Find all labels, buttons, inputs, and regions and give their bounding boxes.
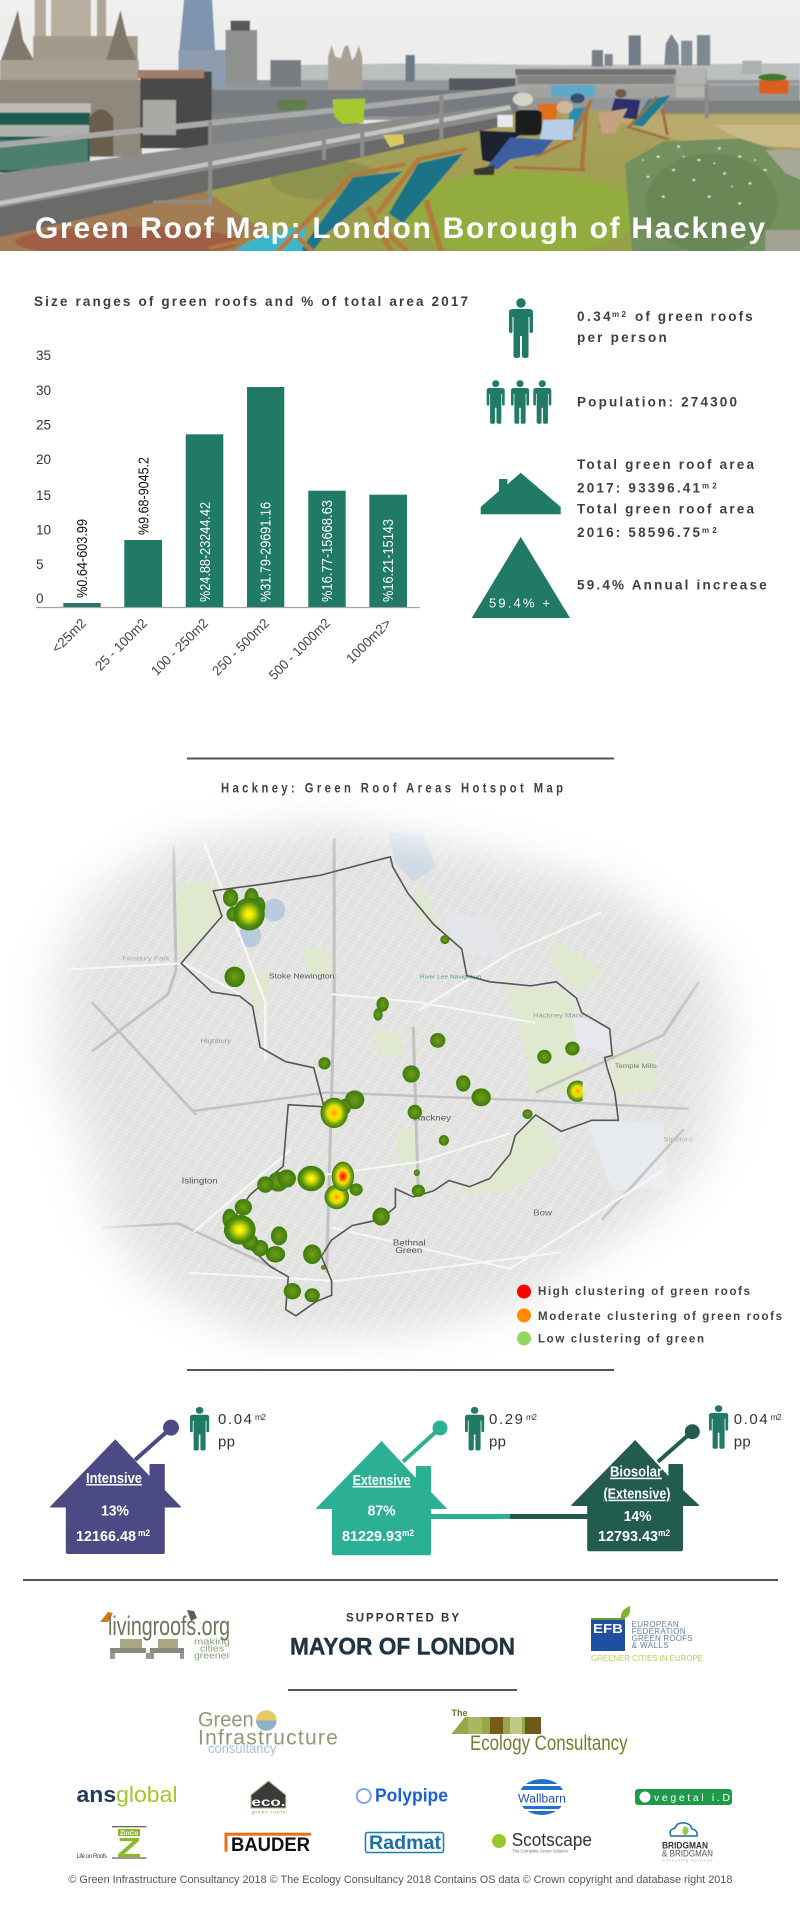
per person: extensive: m2 [526,1412,537,1422]
supported by: Mayor of London: SUPPORTED BY [346,1613,459,1625]
bar value labels: %16.21-15143 [380,519,397,602]
place labels: Islington [182,1176,218,1185]
logo: ZinCo: ZinCo [120,1831,138,1837]
title: Green Roof Map: London Borough of Hackney [35,212,765,245]
icon: increase triangle: 59.4% + [489,595,550,610]
bar value labels: %31.79-29691.16 [258,502,275,602]
logo: Scotscape [492,1830,592,1854]
logo: ZinCo: Z [117,1832,141,1863]
y axis labels: 30 [36,383,51,398]
logo: The Ecology Consultancy [452,1708,628,1755]
supported by: Mayor of London [290,1613,515,1660]
y axis labels: 0 [36,591,44,606]
house: biosolar: (Extensive) [604,1486,670,1503]
heat blobs: moderate and high clustering [224,898,588,1244]
logo: eco green roofs: eco. [252,1795,286,1809]
place labels: Bethnal [393,1238,426,1247]
place labels: Hackney Marsh [533,1013,586,1019]
bar value labels: %9.68-9045.2 [136,457,152,535]
bar value labels [74,457,397,602]
stat: per person: 0.34 [577,309,611,324]
logo: vegetal i.D [635,1789,732,1805]
base map [40,812,743,1350]
icon: person [509,298,533,358]
logo: livingroofs.org: livingroofs.org [108,1611,230,1641]
logo: The Ecology Consultancy: Ecology Consultancy [470,1732,628,1755]
stat: per person: per person [577,330,667,345]
logo: European Federation Green Roofs and Walls: EFB [593,1621,623,1636]
logo: Green Infrastructure Consultancy: consultancy [208,1740,276,1756]
logo: Bridgman and Bridgman: & BRIDGMAN [662,1849,713,1860]
stat: total area 2017 and 2016: Total green roof area [577,501,754,516]
stat: annual increase: 59.4% Annual increase [577,577,767,592]
bars [63,387,407,607]
house: biosolar: m2 [658,1528,670,1538]
logo: European Federation Green Roofs and Walls [591,1606,703,1663]
per person: extensive [465,1407,537,1451]
per person: biosolar [709,1405,782,1451]
logo: Radmat: Radmat [369,1833,442,1854]
logo: European Federation Green Roofs and Walls: FEDERATION [632,1627,686,1636]
category labels: 250 - 500m2 [209,616,272,678]
house: biosolar: Biosolar [610,1464,662,1481]
heat blobs: low clustering [222,888,580,1302]
house: intensive: 13% [101,1503,129,1520]
y axis labels: 5 [36,557,44,572]
house: extensive [316,1420,448,1555]
per person: biosolar: 0.04 [734,1411,768,1428]
category labels: <25m2 [49,616,89,656]
logo: European Federation Green Roofs and Walls: & WALLS [632,1641,669,1650]
stat: total area 2017 and 2016: 2017: 93396.41 [577,481,700,496]
place labels: Hackney [413,1113,452,1122]
hotspot map [40,812,743,1350]
house: intensive: Intensive [86,1470,142,1487]
bar value labels: %0.64-603.99 [74,519,91,598]
logo: vegetal i.D: vegetal i.D [654,1792,730,1804]
logo: Wallbarn [515,1779,569,1815]
stats panel [472,298,767,618]
y axis labels: 25 [36,418,51,432]
logo: livingroofs.org: making [194,1636,230,1648]
stat: per person [577,309,753,345]
borough boundary [181,857,618,1316]
logo: eco green roofs: green roofs [252,1810,286,1814]
house: biosolar [571,1424,700,1551]
y axis labels: 20 [36,452,51,467]
logo: Bauder: BAUDER [231,1834,310,1856]
legend: high: High clustering of green roofs [538,1286,750,1298]
legend: moderate: Moderate clustering of green roofs [538,1311,782,1323]
house: intensive: m2 [138,1528,150,1538]
icon: three people [487,380,551,424]
stat: total area 2017 and 2016: 2016: 58596.75 [577,525,700,540]
place labels: Bow [533,1208,553,1217]
logo: livingroofs.org: cities [200,1644,224,1654]
category labels: 100 - 250m2 [148,616,211,678]
per person: intensive: pp [218,1434,235,1451]
stat: total area 2017 and 2016: m2 [702,526,717,535]
logo: Bridgman and Bridgman [662,1823,713,1863]
logo: ansglobal: ansglobal [76,1782,178,1807]
category labels: 1000m2> [343,615,394,666]
logo: Green Infrastructure Consultancy [198,1709,338,1756]
place labels: Finsbury Park [122,956,170,962]
bar value labels: %16.77-15668.63 [319,500,336,602]
logo: Scotscape: The Complete Green Solution [512,1848,568,1854]
per person: intensive: m2 [255,1412,266,1422]
icon: increase triangle [472,537,570,618]
logo: ZinCo: Life on Roofs [76,1854,107,1860]
place labels: Stratford [663,1137,693,1143]
stat: per person: m2 [612,310,627,319]
logo: Bridgman and Bridgman: BRIDGMAN [662,1841,708,1852]
logo: The Ecology Consultancy: The [452,1708,468,1718]
category labels: 500 - 1000m2 [266,616,333,683]
bar chart: size ranges [36,348,420,683]
logo: ZinCo [76,1827,146,1863]
map legend [517,1285,782,1346]
legend: low: Low clustering of green [538,1334,704,1346]
logo: Polypipe: Polypipe [375,1786,448,1806]
house: intensive [50,1420,181,1554]
bar value labels: %24.88-23244.42 [197,502,214,602]
logo: European Federation Green Roofs and Walls: GREENER CITIES IN EUROPE [591,1654,703,1663]
house: intensive: 12166.48 [76,1528,136,1545]
logo: Scotscape: Scotscape [512,1830,592,1850]
logo: European Federation Green Roofs and Walls: EUROPEAN [632,1620,679,1629]
y axis labels: 35 [36,348,51,363]
category labels [49,615,394,683]
logo: Green Infrastructure Consultancy: Infrastructure [198,1726,338,1749]
logo: European Federation Green Roofs and Walls: GREEN ROOFS [632,1634,693,1643]
house: extensive: 87% [368,1503,396,1520]
place labels: Green [395,1246,422,1255]
supported by: Mayor of London: MAYOR OF LONDON [290,1633,515,1660]
house: biosolar: 12793.43 [598,1528,658,1545]
per person: biosolar: pp [734,1434,751,1451]
place labels [122,956,693,1255]
logo: Wallbarn: Wallbarn [518,1794,566,1806]
map heading: Hackney: Green Roof Areas Hotspot Map [221,780,563,796]
stat: population: Population: 274300 [577,395,737,410]
category labels: 25 - 100m2 [92,616,150,673]
logo: livingroofs.org [100,1610,230,1662]
per person: extensive: 0.29 [489,1411,523,1428]
per person: intensive: 0.04 [218,1411,252,1428]
y axis labels: 15 [36,488,51,503]
per person: extensive: pp [489,1434,506,1451]
y axis labels: 10 [36,522,51,538]
per person: biosolar: m2 [770,1412,782,1422]
icon: house [481,473,561,514]
stat: total area 2017 and 2016: m2 [702,482,717,490]
logo: Bridgman and Bridgman: Consulting Services [662,1858,712,1863]
house: extensive: m2 [402,1528,414,1538]
connector: extensive to biosolar [431,1514,588,1519]
place labels: Highbury [201,1039,232,1045]
place labels: Temple Mills [615,1063,657,1070]
place labels: River Lee Navigation [420,975,481,980]
place labels: Stoke Newington [269,972,334,980]
per person: intensive [190,1407,266,1451]
stat: total area 2017 and 2016 [577,457,754,540]
stat: total area 2017 and 2016: Total green roof area [577,457,754,472]
header photo: rooftop scene [0,0,800,260]
house: extensive: 81229.93 [342,1528,402,1545]
chart heading: Size ranges of green roofs and % of total area 2017 [34,294,468,309]
logo: Green Infrastructure Consultancy: Green [198,1709,254,1732]
logo: eco green roofs [251,1781,286,1814]
footer credits: © Green Infrastructure Consultancy 2018 © The Ecology Consultancy 2018 Contains OS data © Crown copyright and database right 2018 [68,1874,732,1886]
y axis labels [36,348,51,606]
house: extensive: Extensive [353,1472,411,1489]
logo: livingroofs.org: greener [194,1650,230,1662]
house: biosolar: 14% [624,1508,652,1525]
stat: per person: of green roofs [635,309,753,324]
